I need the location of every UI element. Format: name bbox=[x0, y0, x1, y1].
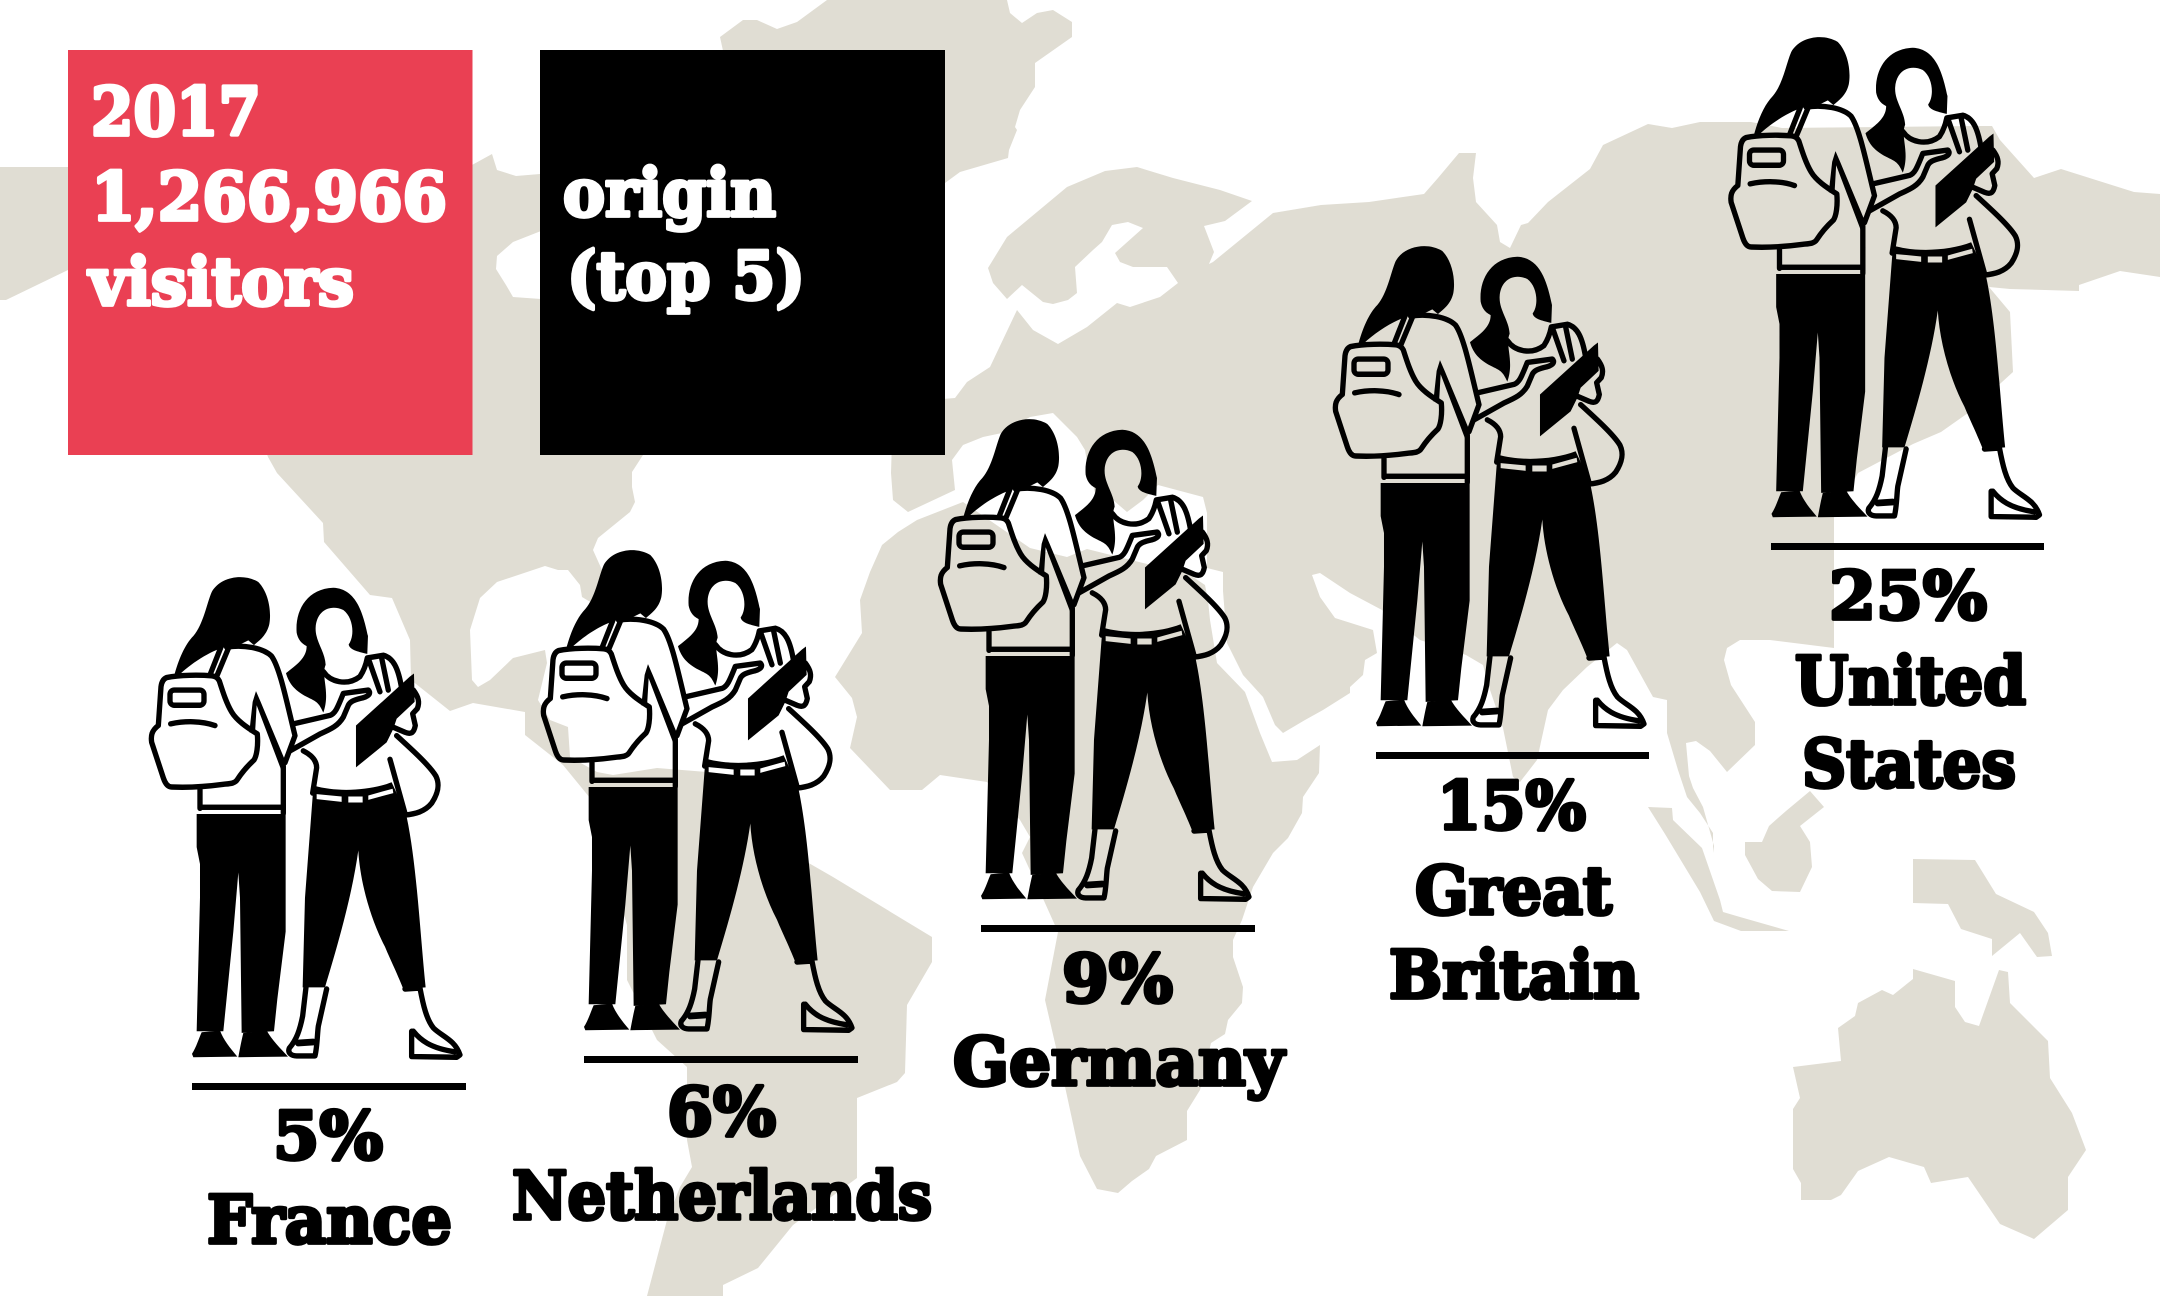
map: Indochina and Borneo bbox=[1745, 791, 1824, 892]
text: year and visitor count bbox=[87, 73, 447, 321]
map: Eurasia bbox=[891, 122, 2160, 853]
text: origin top 5: (top 5) bbox=[567, 237, 805, 315]
label: United States: United bbox=[1795, 642, 2026, 720]
map: Africa bbox=[835, 502, 1320, 1193]
chart item: Netherlands 6% bbox=[512, 550, 932, 1235]
chart item: Germany 9% bbox=[940, 419, 1286, 1101]
icon: two travellers, Great Britain bbox=[1335, 246, 1644, 726]
icon: two travellers, United States bbox=[1731, 37, 2039, 517]
text: origin top 5 bbox=[563, 154, 805, 315]
map: Australia bbox=[1793, 969, 2086, 1239]
text: year and visitor count: 1,266,966 bbox=[91, 158, 447, 236]
chart item: France 5% bbox=[151, 577, 466, 1259]
text: origin top 5: origin bbox=[563, 154, 776, 232]
text: year and visitor count: visitors bbox=[87, 243, 354, 321]
label: United States: 25% bbox=[1829, 557, 1987, 635]
label: Germany: Germany bbox=[953, 1023, 1286, 1101]
label: France: France bbox=[207, 1181, 452, 1259]
map: Hudson Bay bbox=[496, 231, 541, 299]
label: United States: States bbox=[1802, 725, 2016, 803]
label: United States bbox=[1795, 557, 2026, 803]
panel: total visitors bbox=[68, 50, 472, 455]
panel: origin heading bbox=[540, 50, 945, 455]
label: Netherlands: 6% bbox=[667, 1073, 776, 1151]
icon: two travellers, Netherlands bbox=[543, 550, 852, 1030]
label: Germany: 9% bbox=[1062, 940, 1173, 1018]
chart item: Great Britain 15% bbox=[1335, 246, 1649, 1014]
label: Netherlands bbox=[512, 1073, 932, 1235]
chart item: United States 25% bbox=[1731, 37, 2044, 803]
text: year and visitor count: 2017 bbox=[91, 73, 261, 151]
label: Great Britain: Great bbox=[1415, 852, 1612, 930]
label: France: 5% bbox=[273, 1097, 383, 1175]
label: France bbox=[207, 1097, 452, 1259]
label: Great Britain bbox=[1389, 767, 1639, 1014]
icon: two travellers, France bbox=[151, 577, 460, 1057]
map: Sumatra bbox=[1648, 807, 1789, 931]
label: Great Britain: 15% bbox=[1437, 767, 1586, 845]
map: Americas and Greenland bbox=[0, 0, 1072, 1296]
map: New Guinea bbox=[1913, 859, 2052, 957]
label: Netherlands: Netherlands bbox=[512, 1157, 932, 1235]
icon: two travellers, Germany bbox=[940, 419, 1249, 899]
label: Great Britain: Britain bbox=[1389, 936, 1639, 1014]
label: Germany bbox=[953, 940, 1286, 1101]
